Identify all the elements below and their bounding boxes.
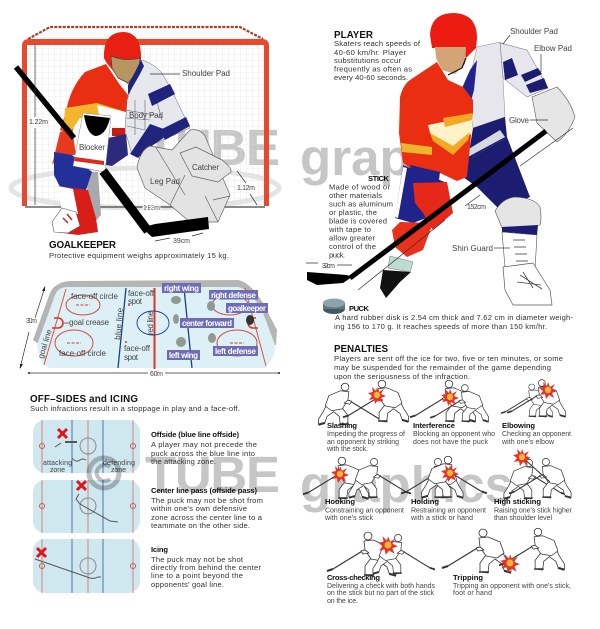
body pad label: Body Pad <box>129 111 163 120</box>
watermark bottom: graphics <box>300 456 513 513</box>
center line pass diagram <box>33 480 140 533</box>
icing text: Icing <box>151 545 168 554</box>
helmet <box>430 13 477 58</box>
offside diagram: zone <box>111 467 126 474</box>
watermark top: graphics <box>300 129 513 186</box>
face-off spots <box>125 304 130 343</box>
rink labels: blue line <box>113 307 125 340</box>
goal frame <box>22 39 269 206</box>
center line pass text: Center line pass (offside pass) <box>151 486 257 495</box>
red jersey <box>399 62 473 181</box>
offside diagram <box>33 420 140 474</box>
blocker label: Blocker <box>79 143 105 152</box>
left skate <box>380 270 411 298</box>
offside text: A player may not precede the <box>151 440 257 449</box>
helmet <box>104 32 141 84</box>
white glove <box>532 87 575 142</box>
rink ice <box>37 287 275 368</box>
rink labels <box>36 289 155 362</box>
shin guard <box>502 232 537 270</box>
stick heading: STICK <box>368 174 390 183</box>
knee pad <box>495 197 541 230</box>
jersey yellow band <box>64 103 126 130</box>
right arm <box>500 43 548 97</box>
stick text block <box>328 174 393 260</box>
center line pass text: within one's own defensive <box>150 504 247 513</box>
stick description: or plastic, the <box>329 208 377 217</box>
catcher <box>180 147 231 182</box>
center line pass text: The puck may not be shot from <box>151 496 263 505</box>
puck description <box>334 313 573 331</box>
icing text: The puck may not be shot <box>151 555 244 564</box>
stick description: control of the <box>329 242 376 251</box>
penalty: elbowing: with one's elbow <box>501 439 555 446</box>
rink labels: face-off circle <box>71 292 119 301</box>
penalty: cross-checking: Delivering a check with both hands <box>327 583 436 590</box>
navy shorts <box>463 137 530 210</box>
elbow pad label <box>534 44 572 72</box>
blade length dimension: 32cm <box>322 263 335 270</box>
red glove <box>413 182 453 230</box>
icing text <box>151 545 261 589</box>
player description <box>334 39 421 82</box>
stick description: other materials <box>329 191 382 200</box>
position tags <box>162 283 268 360</box>
right wing tag: right wing <box>164 284 199 293</box>
penalty: holding: Restraining an opponent <box>411 508 486 514</box>
rink boards <box>33 280 277 345</box>
player illustration <box>306 13 575 314</box>
off-sides section <box>30 394 263 593</box>
dark pants <box>105 134 128 166</box>
center line pass text: teammate on the other side. <box>151 521 250 530</box>
icing text: line to a point beyond the <box>151 571 243 580</box>
penalties intro: Players are sent off the ice for two, five or ten minutes, or some <box>334 354 563 363</box>
rink width dimension <box>20 286 45 369</box>
catcher label: Catcher <box>192 163 219 172</box>
height dimension: 1.22m <box>29 119 48 126</box>
leg pad left <box>52 186 98 235</box>
watermark top: TUBE <box>145 119 280 176</box>
shin guard label: Shin Guard <box>452 244 493 253</box>
penalties intro <box>334 354 563 381</box>
stick length dimension <box>358 128 573 290</box>
penalties section <box>303 344 573 605</box>
arm band <box>148 84 175 106</box>
right skate <box>503 263 552 305</box>
player description: Skaters reach speeds of <box>334 39 421 48</box>
depth dimension <box>237 171 257 205</box>
penalties heading: PENALTIES <box>334 344 388 355</box>
player text block <box>334 30 421 82</box>
offside diagram: defending <box>103 460 135 467</box>
stick length dimension: 152cm <box>467 204 486 211</box>
right shoulder and chest <box>470 42 517 128</box>
goalkeeper tag: goalkeeper <box>228 304 266 313</box>
penalty: tripping: foot or hand <box>453 590 492 597</box>
goal net top <box>28 27 263 39</box>
penalty: holding: with a stick or hand <box>410 515 473 522</box>
thigh <box>54 152 92 191</box>
waist stripes <box>465 117 507 177</box>
watermark bottom <box>145 446 513 513</box>
watermark bottom: TUBE <box>145 446 280 503</box>
stick description: Made of wood or <box>329 182 390 192</box>
left wing tag: left wing <box>169 351 198 360</box>
puck description: A hard rubber disk is 2.54 cm thick and 7.62 cm in diameter weigh- <box>335 313 573 322</box>
penalty: high sticking <box>494 449 573 522</box>
shoulder pad label: Shoulder Pad <box>182 69 230 78</box>
center forward tag: center forward <box>182 319 232 328</box>
rink labels: face-off <box>124 344 151 353</box>
icing text: directly from behind the center <box>151 563 261 572</box>
back of torso <box>52 128 76 165</box>
penalty: elbowing: Checking an opponent <box>502 431 571 438</box>
sleeve stripe <box>401 143 432 155</box>
offside text <box>151 430 257 466</box>
sock <box>388 256 413 272</box>
penalty: slashing <box>318 380 409 453</box>
glove label <box>509 116 548 125</box>
puck description: ing 156 to 170 g. It reaches speeds of more than 150 km/hr. <box>334 322 547 331</box>
rink labels: red line <box>146 310 155 335</box>
player description: every 40-60 seconds. <box>334 73 408 82</box>
skate <box>52 208 80 233</box>
rink length dimension: 60m <box>150 371 163 378</box>
goalkeeper description: Protective equipment weighs approximately 15 kg. <box>49 251 229 260</box>
shoulder pad label <box>503 27 558 44</box>
goal and goalkeeper illustration <box>11 27 279 245</box>
shoulder pad label: Shoulder Pad <box>510 27 558 36</box>
player description: 40-60 km/hr. Player <box>334 48 406 57</box>
penalty: hooking: with one's stick <box>324 515 374 522</box>
back leg shadow <box>85 172 101 225</box>
penalty: slashing: with the stick. <box>326 446 368 453</box>
leg pad label: Leg Pad <box>150 177 180 186</box>
chest protector <box>125 60 190 155</box>
rink labels: goal line <box>36 328 54 360</box>
offside diagram: zone <box>50 467 65 474</box>
penalty: high sticking: High sticking <box>494 497 541 506</box>
rink width dimension: 30m <box>26 318 37 325</box>
penalty: hooking <box>303 457 411 522</box>
penalty: slashing: Impeding the progress of <box>327 431 405 438</box>
face <box>435 47 466 74</box>
mask <box>111 56 140 83</box>
penalty: high sticking: than shoulder level <box>494 515 552 522</box>
rink labels: goal crease <box>69 318 110 327</box>
stick description: such as aluminum <box>329 200 393 208</box>
blocker <box>73 113 111 172</box>
penalty: cross-checking: Cross-checking <box>327 573 380 582</box>
penalty: cross-checking: on the ice. <box>327 598 358 605</box>
rink labels: face-off <box>128 289 155 298</box>
off-sides heading: OFF–SIDES and ICING <box>30 394 138 405</box>
offside diagram: attacking <box>43 460 72 467</box>
stick description: allow greater <box>329 234 375 242</box>
penalty: hooking: Constraining an opponent <box>325 508 404 514</box>
rink diagram <box>20 280 280 378</box>
shoulder pad label <box>150 69 230 78</box>
cuff <box>410 165 440 188</box>
stick description <box>328 182 393 260</box>
off-sides subtitle: Such infractions result in a stoppage in play and a face-off. <box>30 404 240 413</box>
offside text: the attacking zone. <box>151 457 216 466</box>
rink labels: face-off circle <box>59 349 107 358</box>
watermark top <box>145 119 513 186</box>
penalty: holding <box>401 456 487 522</box>
penalty: holding: Holding <box>411 497 439 506</box>
offside text: Offside (blue line offside) <box>151 430 239 439</box>
stick description: blade is covered <box>329 216 387 226</box>
glove label: Glove <box>509 116 530 125</box>
icing text: opponents' goal line. <box>151 580 224 589</box>
puck text block <box>334 304 573 331</box>
puck <box>323 298 345 314</box>
penalty: high sticking: Raising one's stick higher <box>494 508 573 514</box>
blade dimension: 39cm <box>173 238 190 245</box>
goal net <box>26 43 266 206</box>
goal base line <box>25 206 265 208</box>
goalkeeper stick <box>16 67 74 138</box>
puck heading: PUCK <box>349 304 370 313</box>
icing diagram <box>33 539 140 593</box>
penalty: interference: does not have the puck <box>413 439 488 446</box>
jersey flash <box>428 115 473 150</box>
blade dimension <box>155 233 203 245</box>
rink lines <box>44 288 266 369</box>
left shorts <box>395 165 447 223</box>
player description: substitutions occur <box>334 56 401 65</box>
left defense tag: left defense <box>215 347 257 356</box>
penalty: interference <box>410 380 495 446</box>
depth dimension: 1.12m <box>237 185 255 192</box>
rink players <box>171 296 254 347</box>
offside text: puck across the blue line into <box>151 449 255 458</box>
penalty: elbowing <box>501 380 571 446</box>
penalty: slashing: Slashing <box>327 421 357 430</box>
penalty: tripping: Tripping <box>453 573 483 582</box>
penalty: elbowing: Elbowing <box>502 421 535 430</box>
center line pass text: zone across the center line to a <box>151 513 263 522</box>
goalkeeper <box>16 32 231 237</box>
navy waist <box>130 124 172 158</box>
center line pass text <box>150 486 263 530</box>
penalty: cross-checking: on the stick but no part of the stick <box>327 590 434 597</box>
width dimension: 1.83m <box>143 205 160 212</box>
red jersey <box>66 64 128 122</box>
goalkeeper heading: GOALKEEPER <box>49 240 116 251</box>
player stick <box>350 131 546 278</box>
rink labels: spot <box>124 353 139 362</box>
stick description: with tape to <box>328 225 371 234</box>
penalties intro: upon the seriousness of the infraction. <box>334 372 470 381</box>
penalty: tripping: Tripping an opponent with one's stick, <box>453 583 571 590</box>
right defense tag: right defense <box>211 291 257 300</box>
shin band <box>502 225 538 235</box>
player heading: PLAYER <box>334 30 373 41</box>
stick description: puck. <box>329 250 345 260</box>
penalty: interference: Blocking an opponent who <box>413 431 495 438</box>
watermark copyright symbol <box>89 458 119 488</box>
player description: frequently as often as <box>334 64 412 74</box>
red pants <box>392 222 433 257</box>
blade length dimension <box>306 263 352 270</box>
penalty: tripping <box>442 528 571 597</box>
rink labels: spot <box>128 297 143 306</box>
penalty: interference: Interference <box>413 421 455 430</box>
watermark ring <box>11 168 279 208</box>
elbow pad label: Elbow Pad <box>534 44 572 53</box>
penalty: cross-checking <box>327 532 436 605</box>
penalty: hooking: Hooking <box>325 497 355 506</box>
leg pads <box>137 130 230 222</box>
penalties intro: may be suspended for the remainder of the game depending <box>334 363 551 372</box>
penalty: slashing: an opponent by striking <box>327 439 399 446</box>
